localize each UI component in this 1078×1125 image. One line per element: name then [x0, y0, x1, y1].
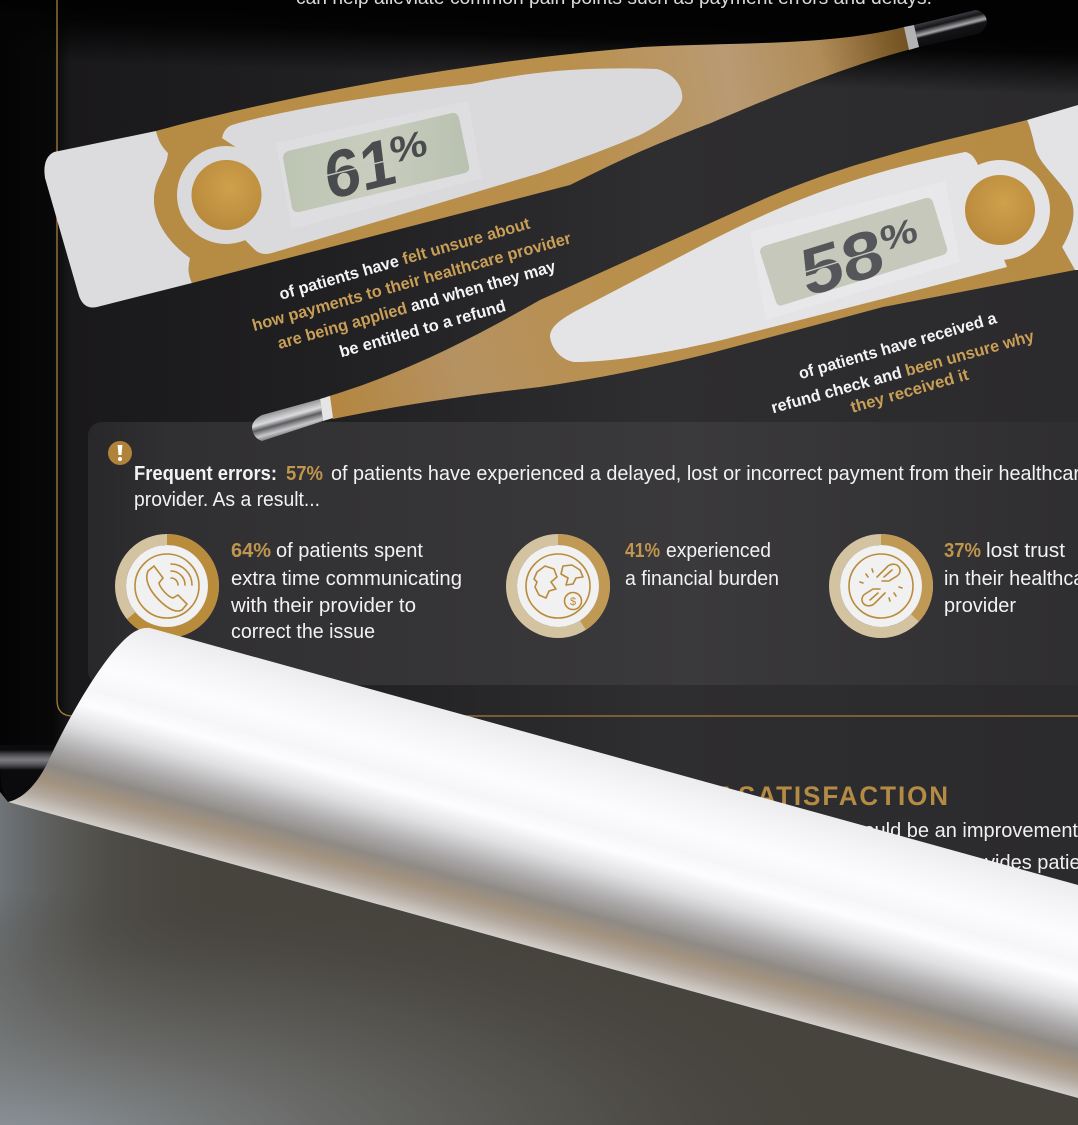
curled corner back side: [0, 745, 70, 802]
errors headline: Frequent errors:: [134, 462, 277, 485]
lcd reading 61%: 61: [321, 124, 400, 215]
stat: 41%: [512, 540, 779, 632]
caption line 3: are being applied and when they may: [276, 257, 558, 353]
lcd bezel: [276, 101, 482, 229]
round button: [192, 160, 262, 230]
stat text: 41%: 41%: [625, 540, 660, 562]
probe tip: [914, 10, 987, 47]
stat text: 64%: extra time communicating: [231, 568, 462, 590]
silver band: [904, 25, 919, 50]
thermometer caption: 58%: [769, 309, 1037, 417]
white handle: [1027, 105, 1078, 270]
thermometer caption: 61%: [250, 215, 574, 361]
lcd bezel: [750, 181, 960, 320]
caption line 1: of patients have felt unsure about: [277, 215, 533, 304]
icon: phone: [147, 564, 192, 611]
section text line 1: could be an improvement: [853, 820, 1078, 842]
donut: 41%: [512, 540, 604, 632]
lcd reading 61%: [317, 116, 433, 216]
silver band: [320, 396, 333, 421]
icon: broken map and dollar: [534, 565, 583, 610]
stat text: 37%: provider: [944, 595, 1016, 617]
stat text: 37%: lost trust: [986, 540, 1065, 562]
donut: 64%: [120, 540, 214, 632]
round button: [965, 175, 1035, 245]
stat text: 64%: of patients spent: [276, 540, 423, 562]
donut: 37%: [834, 540, 928, 632]
gold body: [154, 27, 919, 283]
stat: 64%: [120, 540, 462, 643]
white handle: [44, 131, 192, 308]
errors headline second line: provider. As a result...: [134, 488, 320, 511]
white blade: [222, 68, 682, 254]
stat text: 41%: a financial burden: [625, 568, 779, 590]
stat text: 64%: correct the issue: [231, 621, 375, 643]
lcd reading 61%: %: [387, 121, 429, 172]
gold frame outline: [57, 0, 1078, 716]
caption line 4: be entitled to a refund: [337, 297, 508, 361]
caption line 2: how payments to their healthcare provider: [250, 229, 574, 335]
lcd screen: [760, 198, 947, 306]
white blade: [550, 152, 1007, 362]
stat text: 41%: experienced: [666, 540, 771, 562]
ring around button: [950, 160, 1050, 260]
panel: frequent errors: [88, 422, 1078, 685]
lcd reading 58%: [792, 203, 925, 313]
donut: 41%: $: [570, 596, 576, 608]
caption line 3: they received it: [849, 366, 971, 417]
ring around button: [177, 146, 275, 244]
lcd screen: [283, 113, 469, 212]
lcd reading 58%: 58: [796, 214, 889, 312]
stat: 37%: [834, 540, 1078, 632]
errors headline: 57%: [286, 462, 323, 485]
thermometer: 58%: [252, 105, 1078, 441]
gold body: [326, 120, 1075, 419]
caption line 1: of patients have received a: [797, 309, 999, 383]
caption line 2: refund check and been unsure why: [769, 327, 1037, 417]
icon: alert: [108, 441, 132, 465]
curled white page: [8, 628, 1078, 1098]
probe tip: [252, 399, 323, 441]
icon: broken chain: [860, 564, 902, 606]
section heading: E: [712, 781, 730, 811]
stat text: 64%: 64%: [231, 540, 271, 562]
lcd reading 58%: %: [877, 211, 920, 260]
section heading: SATISFACTION: [738, 781, 950, 811]
thermometer: 61%: [44, 10, 987, 308]
floor beneath the page: [0, 792, 1078, 1125]
stat text: 64%: with their provider to: [230, 595, 416, 617]
stat text: 37%: 37%: [944, 540, 981, 562]
